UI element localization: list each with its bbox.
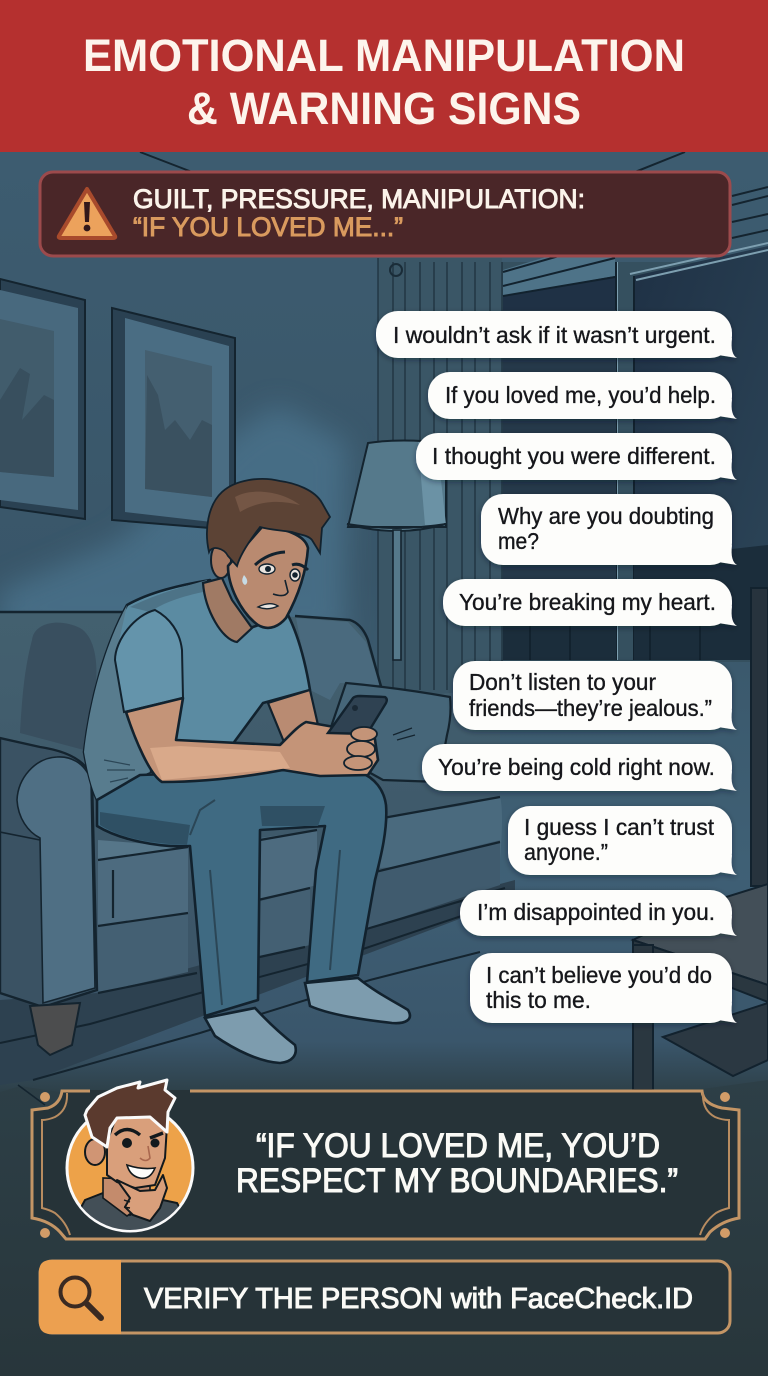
bubble 2 <box>428 372 737 419</box>
quote text: “IF YOU LOVED ME, YOU’D <box>256 1127 660 1165</box>
bubble 1 <box>376 311 737 358</box>
bubble 4: me? <box>498 528 539 554</box>
facial features <box>255 552 308 570</box>
sofa <box>0 612 515 1085</box>
bubble 10: this to me. <box>486 987 591 1013</box>
arms <box>268 690 318 742</box>
jeans <box>97 770 386 1016</box>
alert text: GUILT, PRESSURE, MANIPULATION: <box>133 184 585 214</box>
bubble 6 <box>453 661 737 730</box>
framed picture right <box>112 308 235 530</box>
chat bubbles <box>376 311 737 1023</box>
sofa pillow <box>330 683 451 782</box>
title: EMOTIONAL MANIPULATION <box>83 30 685 81</box>
fingers <box>344 727 377 770</box>
tv and table <box>633 588 768 1090</box>
face <box>228 527 308 628</box>
title: & WARNING SIGNS <box>187 83 581 134</box>
quote panel <box>32 1080 739 1239</box>
bubble 10: I can’t believe you’d do <box>486 962 712 988</box>
neck <box>203 578 252 642</box>
window <box>500 236 768 662</box>
avatar <box>66 1080 195 1235</box>
phone <box>328 696 387 734</box>
verify bar <box>39 1260 730 1334</box>
hair <box>207 479 330 566</box>
bubble 9 <box>460 890 737 936</box>
alert banner <box>40 172 730 256</box>
bubble 6: friends—they’re jealous.” <box>469 695 712 721</box>
title <box>83 30 685 134</box>
bubble 9: I’m disappointed in you. <box>477 899 715 925</box>
curtain <box>378 258 502 698</box>
framed picture left <box>0 279 85 519</box>
bubble 4 <box>481 494 737 565</box>
alert text <box>133 184 585 242</box>
lower dark backdrop <box>0 1080 768 1376</box>
sofa arm <box>0 738 97 1007</box>
ear <box>211 542 231 578</box>
bubble 3 <box>416 433 737 480</box>
torso and t-shirt <box>84 580 310 802</box>
bubble 5 <box>443 579 737 626</box>
bubble 2: If you loved me, you’d help. <box>445 382 716 408</box>
icon: warning triangle <box>59 189 115 238</box>
bubble 3: I thought you were different. <box>432 443 716 469</box>
bubble 4: Why are you doubting <box>498 503 714 529</box>
bubble 8: I guess I can’t trust <box>524 814 715 840</box>
quote text <box>236 1127 678 1200</box>
bubble 6: Don’t listen to your <box>469 669 656 695</box>
bubble 5: You’re breaking my heart. <box>459 589 716 615</box>
alert text: “IF YOU LOVED ME...” <box>133 212 403 242</box>
bubble 10 <box>470 953 737 1023</box>
bubble 7: You’re being cold right now. <box>438 754 715 780</box>
bubble 8: anyone.” <box>524 839 608 865</box>
sofa leg <box>30 1003 80 1055</box>
verify text: VERIFY THE PERSON with FaceCheck.ID <box>144 1283 693 1315</box>
bubble 7 <box>422 744 737 791</box>
man on the sofa <box>84 479 410 1063</box>
floor lamp <box>347 440 446 660</box>
bubble 1: I wouldn’t ask if it wasn’t urgent. <box>393 322 716 348</box>
quote text: RESPECT MY BOUNDARIES.” <box>236 1162 678 1200</box>
floor <box>0 880 768 1095</box>
socks <box>205 1008 296 1063</box>
icon: magnifying glass <box>60 1278 101 1318</box>
bubble 8 <box>508 806 737 875</box>
title banner <box>0 0 768 152</box>
background room scene <box>0 150 768 1100</box>
